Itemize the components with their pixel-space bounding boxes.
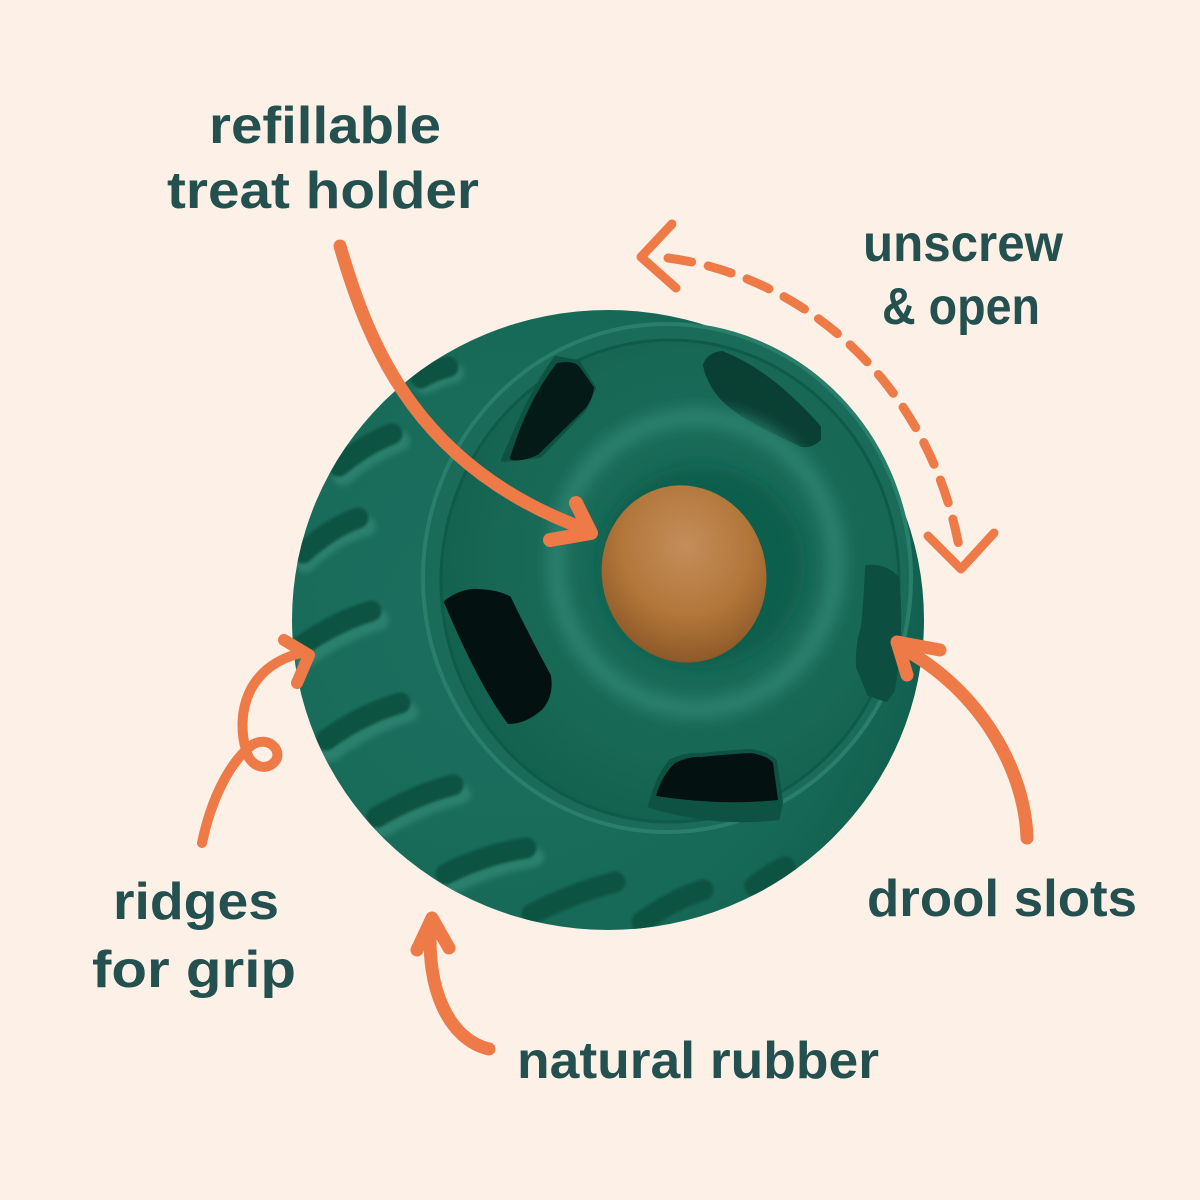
treat (583, 468, 785, 680)
front disc (441, 340, 899, 822)
label: ridges for grip: for grip (92, 941, 296, 999)
heading: refillable treat holder (167, 97, 479, 220)
arrow: dashed unscrew (641, 224, 994, 569)
label: drool slots: drool slots (867, 870, 1137, 928)
label: unscrew and open (863, 215, 1064, 336)
heading: refillable treat holder: refillable (209, 97, 441, 155)
arrow: natural rubber (417, 918, 489, 1049)
label: ridges for grip: ridges (113, 873, 279, 931)
grip ridges (301, 367, 785, 922)
label: unscrew and open: & open (882, 278, 1040, 336)
arrow: ridges (202, 640, 309, 843)
arrow: treat holder (340, 246, 591, 540)
label: unscrew and open: unscrew (863, 215, 1064, 273)
arrow: drool slots (897, 642, 1027, 838)
label: ridges for grip (92, 873, 296, 999)
label: natural rubber: natural rubber (517, 1032, 879, 1090)
ball body (292, 310, 924, 930)
slot bottom (650, 751, 781, 820)
raised donut ring (556, 417, 836, 709)
slot left (446, 591, 550, 722)
slot right (858, 567, 899, 700)
slot top left (503, 358, 594, 460)
slot top right (705, 353, 819, 445)
heading: refillable treat holder: treat holder (167, 162, 479, 220)
front disc rim (423, 324, 911, 832)
drool slots (446, 353, 899, 820)
rubber treat ball (292, 310, 924, 930)
